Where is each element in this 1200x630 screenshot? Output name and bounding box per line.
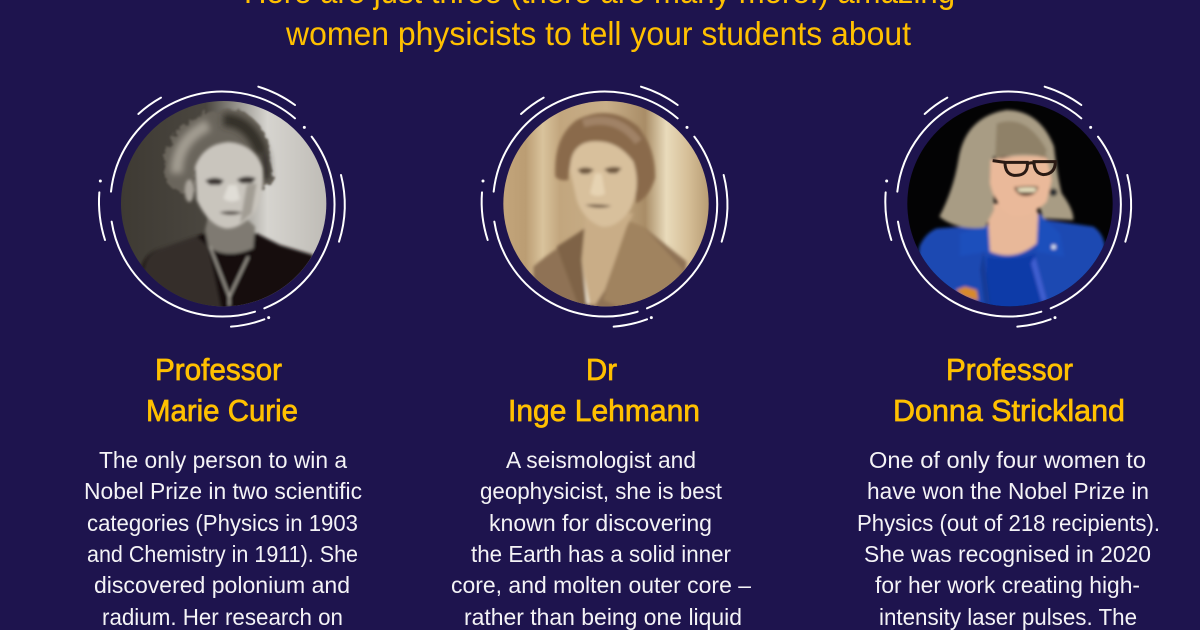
portrait: Marie Curie [121,101,326,306]
text: Lehmann biography [451,447,752,630]
icon: dashed orbit rings [885,87,1131,327]
name: Professor Marie Curie: Marie Curie [146,393,298,428]
text: Strickland biography: Physics (out of 218 recipients). [857,510,1160,536]
text: Strickland biography: have won the Nobel Prize in [867,478,1149,504]
portrait: Inge Lehmann [500,97,713,310]
text: Strickland biography [857,447,1160,630]
text: Lehmann biography: core, and molten outer core – [451,572,752,598]
name: Dr Inge Lehmann: Dr [586,352,617,387]
name: Professor Donna Strickland: Donna Strickland [893,393,1125,428]
name: Professor Marie Curie [146,352,298,428]
panel: Inge Lehmann [451,87,752,630]
text: Curie biography [84,447,362,630]
name: Dr Inge Lehmann: Inge Lehmann [508,393,700,428]
text: Lehmann biography: known for discovering [489,510,712,536]
title [244,0,955,52]
text: Strickland biography: She was recognised in 2020 [864,541,1151,567]
text: Curie biography: discovered polonium and [94,572,350,598]
text: Lehmann biography: rather than being one liquid [464,604,742,630]
icon: dashed orbit rings [99,87,345,327]
panel: Marie Curie [84,87,362,630]
text: Curie biography: categories (Physics in 1903 [87,510,358,536]
text: Lehmann biography: the Earth has a solid inner [471,541,731,567]
text: Curie biography: The only person to win a [99,447,348,473]
name: Dr Inge Lehmann [508,352,700,428]
text: Strickland biography: intensity laser pulses. The [879,604,1137,630]
icon: glasses [993,161,1055,175]
text: Lehmann biography: A seismologist and [506,447,696,473]
name: Professor Donna Strickland [893,352,1125,428]
text: Curie biography: radium. Her research on [102,604,343,630]
text: Lehmann biography: geophysicist, she is best [480,478,722,504]
text: Strickland biography: for her work creating high- [875,572,1140,598]
text: Curie biography: and Chemistry in 1911). She [87,541,358,567]
name: Professor Donna Strickland: Professor [946,352,1073,387]
title: women physicists to tell your students about [285,15,911,52]
text: Strickland biography: One of only four women to [869,447,1146,473]
text: Curie biography: Nobel Prize in two scientific [84,478,362,504]
panel: Donna Strickland [857,87,1160,630]
icon: dashed orbit rings [482,87,727,327]
portrait: Donna Strickland [903,97,1117,310]
name: Professor Marie Curie: Professor [155,352,282,387]
